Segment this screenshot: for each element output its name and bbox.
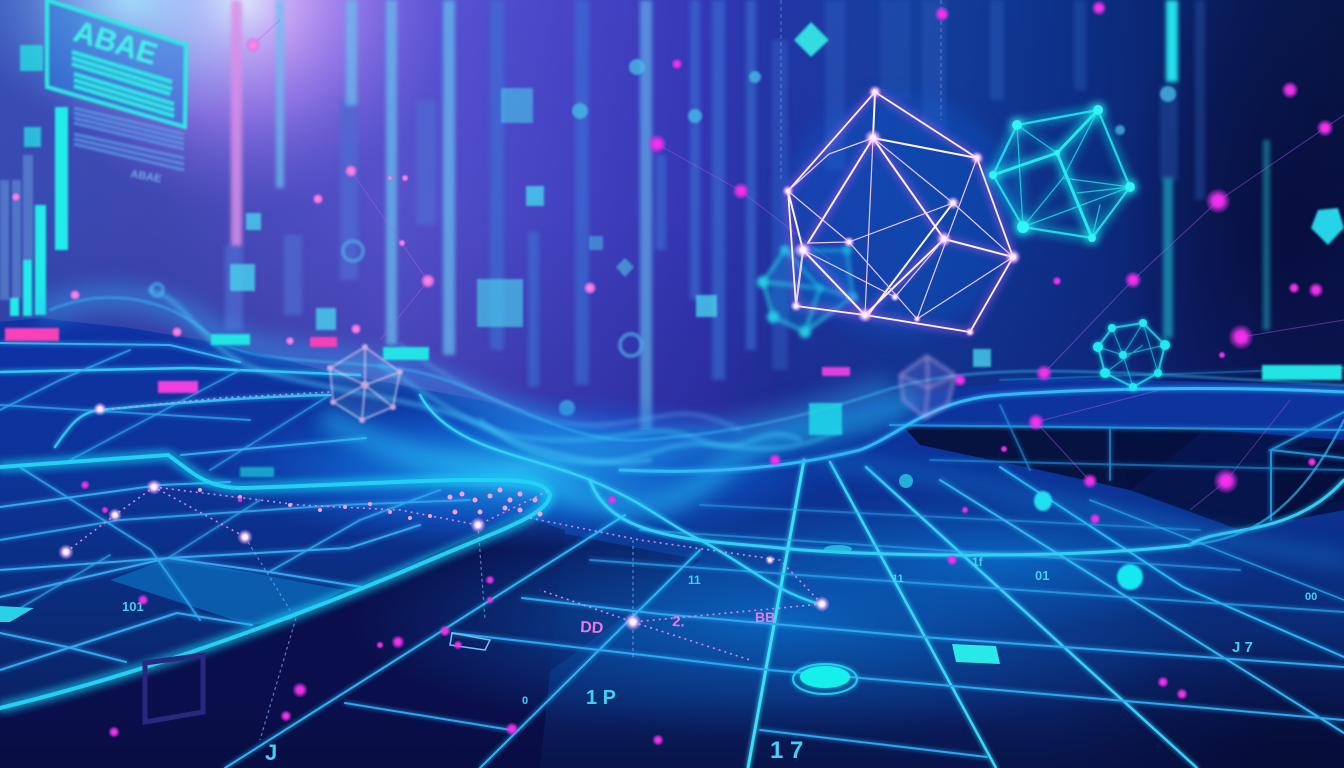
floor labels and pads: 11 xyxy=(688,573,701,587)
floor labels and pads: 00 xyxy=(1305,591,1317,603)
icon: right small cyan polyhedron xyxy=(1093,319,1170,391)
icon: cyan wireframe cube xyxy=(989,105,1135,242)
floor labels and pads: DD xyxy=(580,619,604,637)
left data screen: ABAE xyxy=(129,168,162,185)
floor labels and pads: 0 xyxy=(522,695,528,707)
left data screen xyxy=(0,0,186,316)
vertical data columns xyxy=(225,0,1270,430)
floor labels and pads: BB xyxy=(755,609,775,625)
floor labels and pads: 11 xyxy=(892,573,904,585)
data points trail xyxy=(58,392,830,740)
floor labels and pads: 1 P xyxy=(586,687,616,709)
icon: translucent polyhedron right xyxy=(900,356,955,418)
floor labels and pads xyxy=(0,328,1342,765)
floor labels and pads: J 7 xyxy=(1232,639,1253,656)
screen text lines xyxy=(74,108,184,170)
icon: blurred blue polyhedron behind xyxy=(757,245,858,338)
floor labels and pads: 1f xyxy=(972,555,984,569)
icon: large wireframe polyhedron xyxy=(780,85,1021,337)
screen heading panel xyxy=(47,0,186,127)
floor labels and pads: 101 xyxy=(122,599,144,614)
dark floor below main line xyxy=(0,515,565,768)
floor labels and pads: J xyxy=(265,740,277,765)
floor labels and pads: 1 7 xyxy=(770,737,803,764)
perspective grid xyxy=(0,343,1344,768)
bright flowing wave lines xyxy=(0,290,1344,708)
floor labels and pads: 2. xyxy=(672,613,685,631)
screen bars xyxy=(10,45,68,316)
floor background xyxy=(0,318,1344,768)
floor labels and pads: 01 xyxy=(1035,568,1049,583)
magenta connecting lines xyxy=(253,20,1344,510)
floating squares and rings xyxy=(151,22,1344,416)
vertical dashed threads xyxy=(781,0,941,180)
screen heading panel: ABAE xyxy=(70,15,161,72)
dark floor region right xyxy=(904,427,1205,490)
icon: translucent polyhedron left xyxy=(327,344,403,423)
